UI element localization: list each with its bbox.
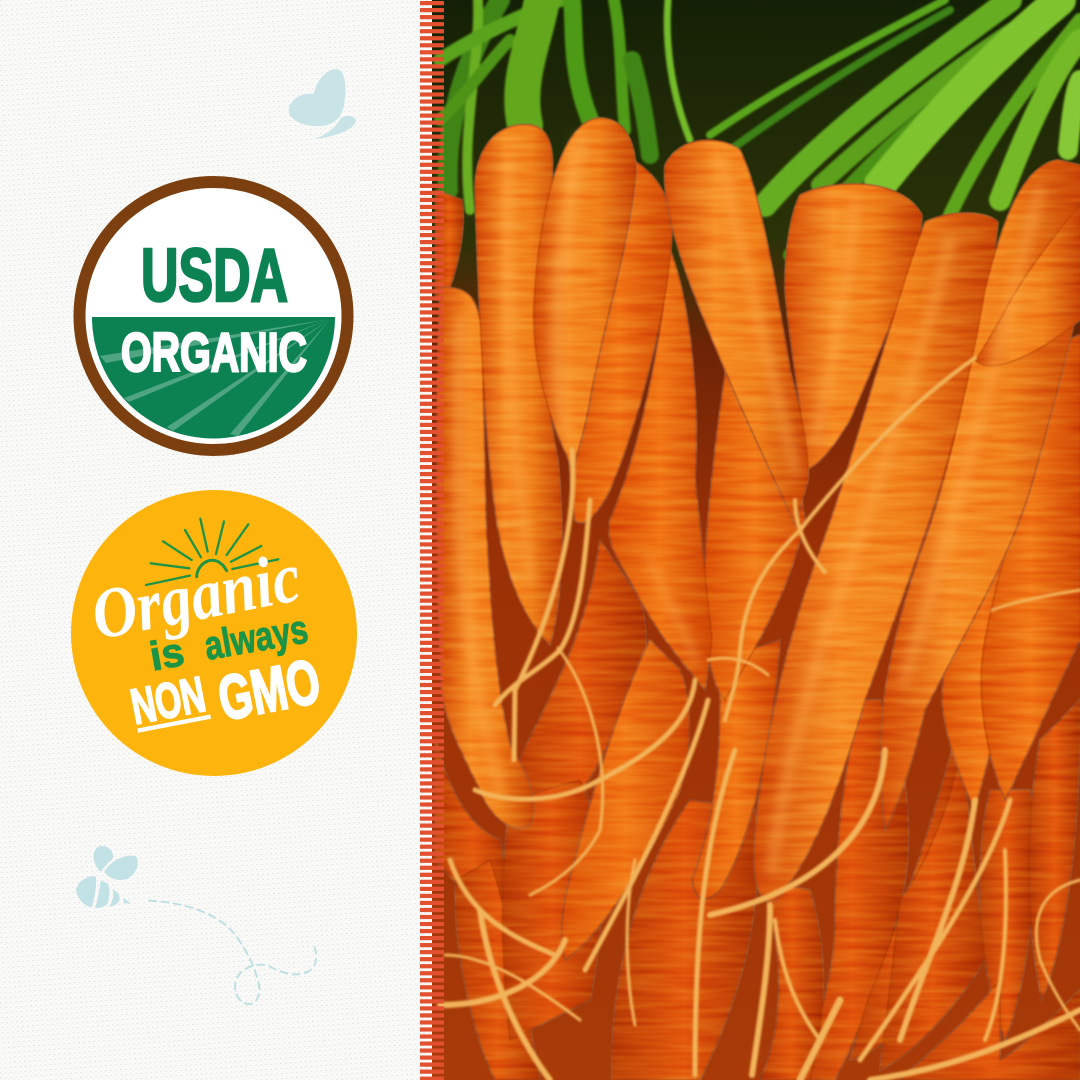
icon: bee with dashed flight path: [76, 846, 316, 1004]
badge text: USDA: USDA: [141, 233, 288, 317]
icon: butterfly: [289, 69, 356, 139]
icon: bee: [76, 846, 138, 908]
underline: [138, 717, 211, 731]
carrot highlights: [458, 140, 1040, 870]
middle carrots: [562, 150, 1080, 960]
roots: [440, 358, 1080, 1080]
yellow disc: [71, 490, 357, 776]
word: is: is: [146, 628, 188, 680]
front carrots: [437, 118, 1080, 901]
badge field with rays: [92, 317, 335, 438]
badge ring: [80, 182, 348, 450]
fabric background panel: [0, 0, 432, 1080]
carrot tops: green stems: [440, 0, 1080, 255]
decorative stripe band: [420, 0, 444, 1080]
word: NON: NON: [126, 666, 210, 735]
back carrots: [436, 190, 1080, 1080]
badge text: ORGANIC: ORGANIC: [121, 321, 307, 383]
photo: carrots: [432, 0, 1080, 1080]
badge: Organic is always Non GMO: [71, 490, 357, 776]
icon: sun: [146, 519, 278, 585]
word: GMO: GMO: [213, 646, 326, 734]
badge: USDA Organic: [80, 182, 348, 450]
script word: Organic: Organic: [85, 537, 307, 655]
flight path: [148, 901, 316, 1004]
badge wording: [85, 537, 326, 735]
word: always: always: [201, 605, 311, 669]
